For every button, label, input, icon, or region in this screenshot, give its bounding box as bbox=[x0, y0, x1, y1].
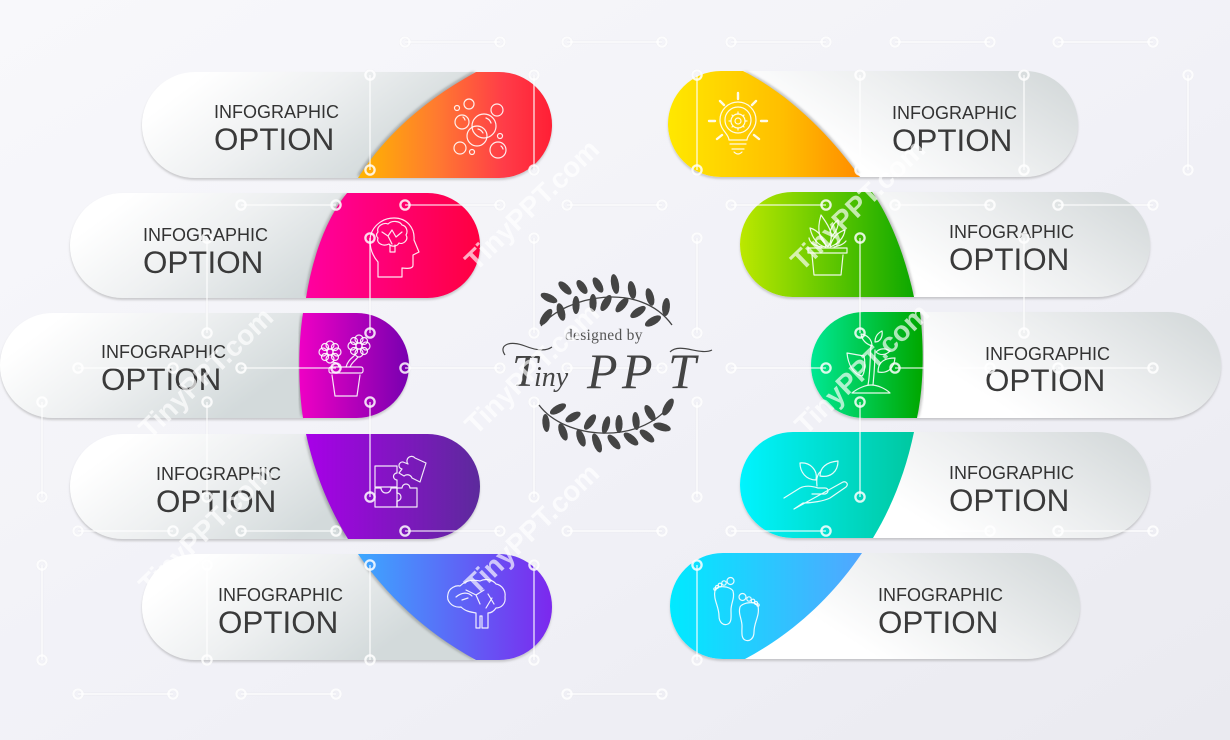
text: left option 2: INFOGRAPHIC bbox=[143, 225, 268, 245]
logo script: Tiny PPT: P bbox=[621, 343, 653, 399]
watermarks: TinyPPT.com: TinyPPT.com bbox=[133, 457, 279, 600]
panel: left option 2 bbox=[70, 193, 480, 298]
icon: hand holding sprout bbox=[784, 461, 847, 509]
logo script: Tiny PPT: T bbox=[668, 343, 699, 399]
icon: bubbles bbox=[454, 99, 506, 158]
text: right option 4: INFOGRAPHIC bbox=[949, 463, 1074, 483]
text: right option 5: OPTION bbox=[878, 605, 998, 640]
panel: left option 3 bbox=[0, 313, 409, 418]
watermarks: TinyPPT.com bbox=[133, 133, 935, 600]
logo text: designed by: designed by bbox=[565, 327, 643, 344]
icon: growing plant bbox=[847, 331, 895, 393]
text: right option 3: OPTION bbox=[985, 363, 1105, 398]
text: left option 3: OPTION bbox=[101, 362, 221, 397]
panel: left option 4 bbox=[70, 434, 480, 539]
watermarks: TinyPPT.com: TinyPPT.com bbox=[459, 457, 605, 600]
icon: light bulb with gear bbox=[709, 93, 767, 154]
panel: right option 2 bbox=[740, 192, 1150, 297]
text: left option 1: INFOGRAPHIC bbox=[214, 102, 339, 122]
text: left option 2: OPTION bbox=[143, 245, 263, 280]
logo script: Tiny PPT: T bbox=[512, 345, 541, 396]
text: left option 1: OPTION bbox=[214, 122, 334, 157]
text: left option 4: OPTION bbox=[156, 484, 276, 519]
icon: succulent in pot bbox=[808, 215, 847, 275]
text: left option 5: OPTION bbox=[218, 605, 338, 640]
panel: left option 5 bbox=[142, 554, 552, 660]
text: left option 5: INFOGRAPHIC bbox=[218, 585, 343, 605]
text: right option 3: INFOGRAPHIC bbox=[985, 344, 1110, 364]
logo: designed by TinyPPT bbox=[503, 273, 712, 454]
icon: brain bbox=[448, 580, 505, 628]
text: left option 3: INFOGRAPHIC bbox=[101, 342, 226, 362]
logo top laurel branch bbox=[537, 273, 672, 329]
text: right option 2: INFOGRAPHIC bbox=[949, 222, 1074, 242]
logo script: Tiny PPT: P bbox=[586, 343, 618, 399]
text: right option 5: INFOGRAPHIC bbox=[878, 585, 1003, 605]
watermarks: TinyPPT.com: TinyPPT.com bbox=[459, 297, 605, 440]
icon: puzzle pieces bbox=[375, 456, 426, 507]
logo script: Tiny PPT: iny bbox=[534, 362, 569, 393]
watermarks: TinyPPT.com: TinyPPT.com bbox=[133, 301, 279, 444]
text: right option 1: OPTION bbox=[892, 123, 1012, 158]
panel: right option 4 bbox=[740, 432, 1150, 538]
logo bottom laurel branch bbox=[539, 397, 676, 454]
logo swashes bbox=[503, 343, 712, 355]
text: right option 1: INFOGRAPHIC bbox=[892, 103, 1017, 123]
watermarks: TinyPPT.com: TinyPPT.com bbox=[785, 133, 931, 276]
icon: flower pot bbox=[319, 335, 370, 396]
panel: left option 1 bbox=[142, 72, 552, 178]
text: right option 4: OPTION bbox=[949, 483, 1069, 518]
watermarks: TinyPPT.com: TinyPPT.com bbox=[459, 133, 605, 276]
panel: right option 1 bbox=[668, 71, 1078, 177]
watermarks: TinyPPT.com: TinyPPT.com bbox=[789, 297, 935, 440]
text: right option 2: OPTION bbox=[949, 242, 1069, 277]
panel: right option 3 bbox=[811, 312, 1221, 418]
text: left option 4: INFOGRAPHIC bbox=[156, 464, 281, 484]
icon: footprints bbox=[714, 578, 759, 641]
panel: right option 5 bbox=[670, 553, 1080, 659]
icon: head with brain bbox=[370, 218, 419, 277]
